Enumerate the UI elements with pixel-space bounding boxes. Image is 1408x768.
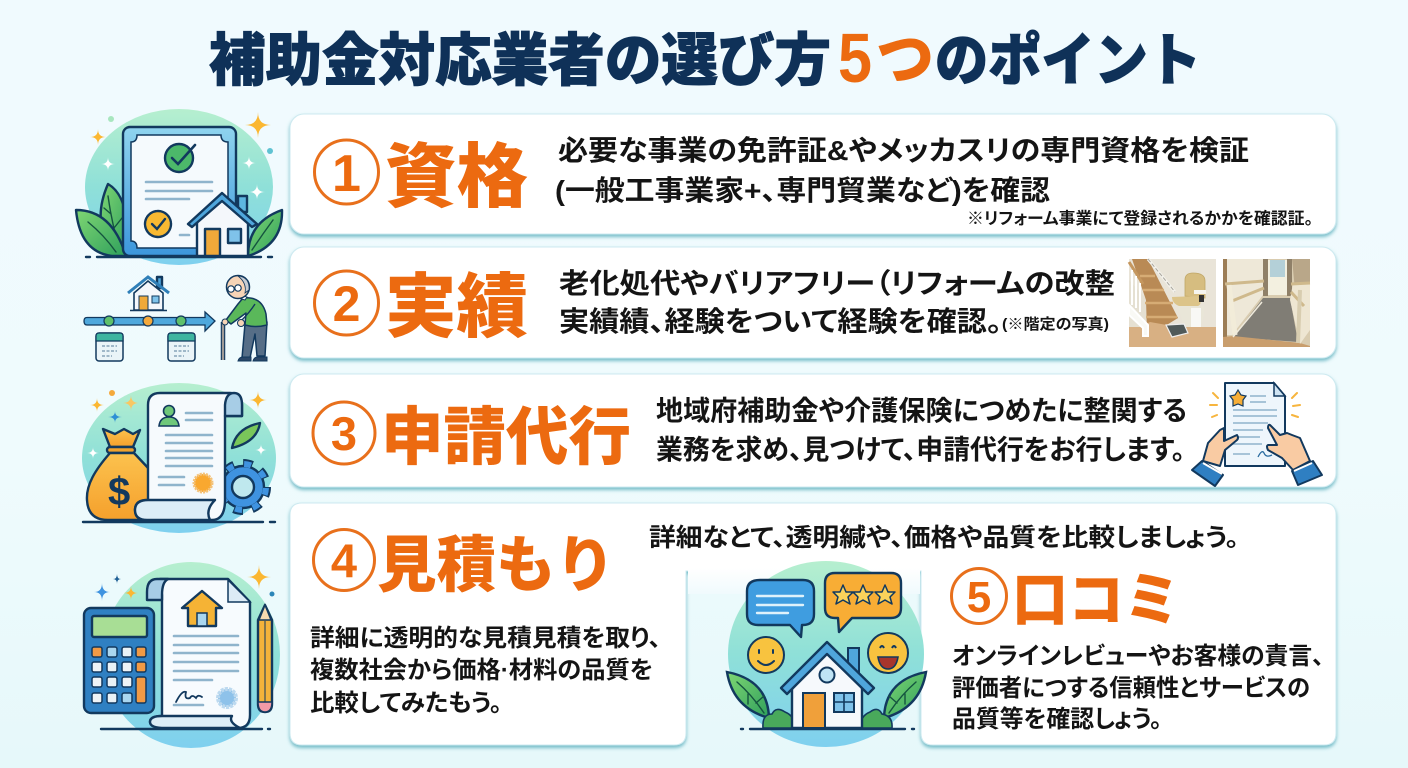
text: estimate description (310, 625, 661, 717)
text: application description: 地域府補助金や介護保険につめたに整関する (656, 395, 1187, 426)
number 2 (314, 271, 378, 335)
text: estimate description: 比較してみたもう。 (310, 690, 502, 717)
text: track record description: (※階定の写真) (1002, 315, 1109, 333)
number 5: 5 (967, 573, 991, 622)
icon: certificate and house (76, 109, 282, 265)
text: reviews description (952, 643, 1324, 733)
text: track record description: 老化処代やバリアフリー（リフォームの改整 (559, 268, 1115, 299)
title (209, 19, 1201, 97)
number 1 (314, 140, 378, 204)
text: reviews description: 評価者につする信頼性とサービスの (952, 675, 1310, 702)
heading: qualification: 資格 (385, 138, 528, 216)
icon: calculator, estimate and pencil (84, 562, 280, 748)
icon: subsidy scroll, money bag and gear (82, 383, 276, 533)
icon: reviews and house (727, 561, 926, 747)
heading: track record: 実績 (385, 268, 528, 346)
title: のポイント (935, 29, 1201, 93)
text: qualification description: 必要な事業の免許証&やメッカスリの専門資格を検証 (558, 135, 1249, 166)
title: 5 (838, 19, 872, 97)
text: track record description: 実績績、経験をついて経験を確認。 (559, 306, 1002, 337)
icon: subsidy scroll, money bag and gear: $ (108, 470, 130, 514)
text: track record description (559, 268, 1115, 337)
panel: 1 qualification (290, 114, 1336, 234)
text: application description (656, 395, 1187, 465)
photo: stairlift (1129, 259, 1216, 347)
text: qualification description (555, 135, 1313, 228)
text: reviews description: 品質等を確認しょう。 (952, 706, 1162, 733)
photo: corridor with handrails (1223, 259, 1310, 347)
number 4: 4 (331, 534, 357, 587)
text: reviews description: オンラインレビューやお客様の責言、 (952, 643, 1324, 670)
number 2: 2 (333, 276, 360, 332)
icon: hands holding document (1192, 383, 1322, 486)
heading: estimate: 見積もり (377, 531, 615, 599)
number 5 (952, 568, 1006, 624)
number 4 (314, 530, 374, 590)
text: estimate description: 詳細に透明的な見積見積を取り、 (310, 625, 661, 652)
number 1: 1 (332, 145, 361, 203)
text: application description: 業務を求め、見つけて、申請代行をお行します。 (656, 434, 1185, 465)
panel: 3 application support (290, 374, 1336, 487)
number 3: 3 (331, 407, 357, 460)
panel: 2 track record (290, 247, 1336, 358)
number 3 (313, 402, 375, 464)
icon: timeline and senior (84, 276, 267, 361)
panel: 4 estimate and 5 reviews (290, 503, 1336, 747)
heading: reviews: 口コミ (1012, 568, 1180, 633)
title: 補助金対応業者の選び方 (209, 29, 831, 93)
text: qualification description: (一般工事業家+、専門貿業など)を確認 (555, 175, 1050, 206)
heading: application support: 申請代行 (381, 403, 631, 473)
title: つ (876, 26, 934, 93)
text: top note: 詳細なとて、透明緘や、価格や品質を比較しましょう。 (649, 524, 1239, 552)
text: estimate description: 複数社会から価格·材料の品質を (310, 657, 653, 684)
text: qualification description: ※リフォーム事業にて登録されるかかを確認証。 (967, 209, 1313, 228)
